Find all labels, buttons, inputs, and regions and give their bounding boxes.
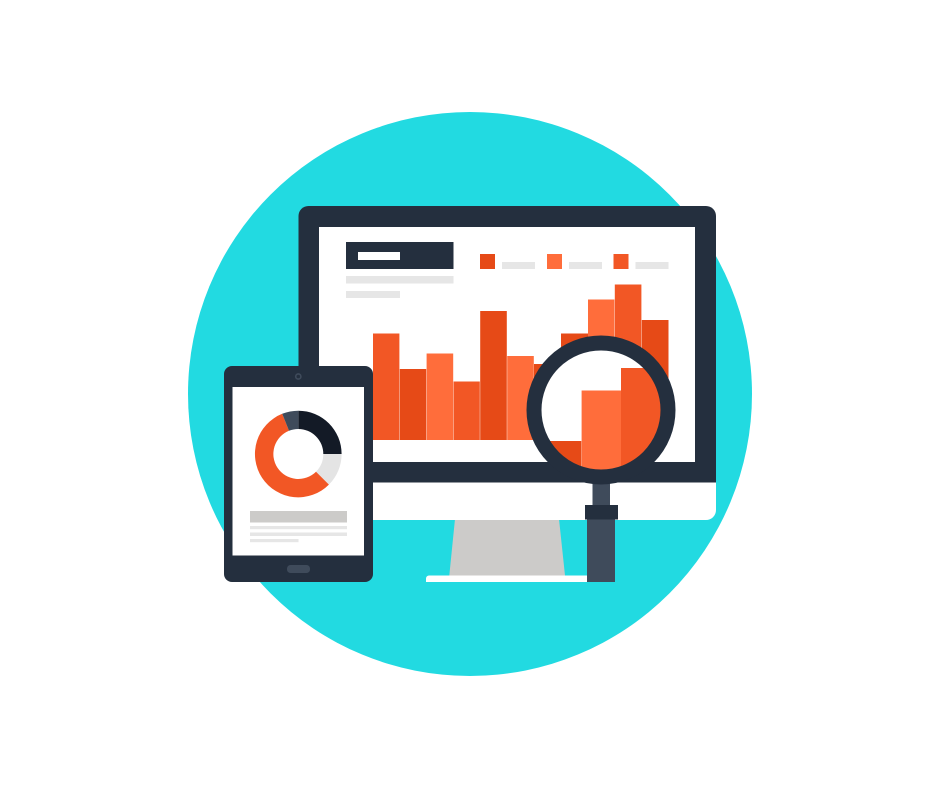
monitor bezel [298,206,716,482]
tablet text lines [250,511,347,542]
donut chart [255,411,342,497]
bar chart [373,284,668,440]
background circle [188,112,752,676]
magnifier neck [592,478,610,506]
magnifier handle [587,519,615,582]
monitor stand [449,519,565,576]
illustration: analytics on monitor and tablet [188,112,752,676]
dashboard subtitle lines [346,276,454,298]
tablet [224,366,373,582]
magnifier collar [585,505,618,520]
dashboard title block [346,242,454,269]
tablet home button [287,565,310,573]
tablet body [224,366,373,582]
monitor screen [319,227,695,462]
magnifying glass [534,343,668,582]
monitor [298,206,716,582]
lens contents [542,350,660,470]
chart legend [480,254,668,269]
tablet camera [296,374,301,379]
magnifier ring [534,343,668,477]
monitor base [426,576,590,582]
monitor chin [298,480,716,520]
tablet screen [232,387,364,556]
